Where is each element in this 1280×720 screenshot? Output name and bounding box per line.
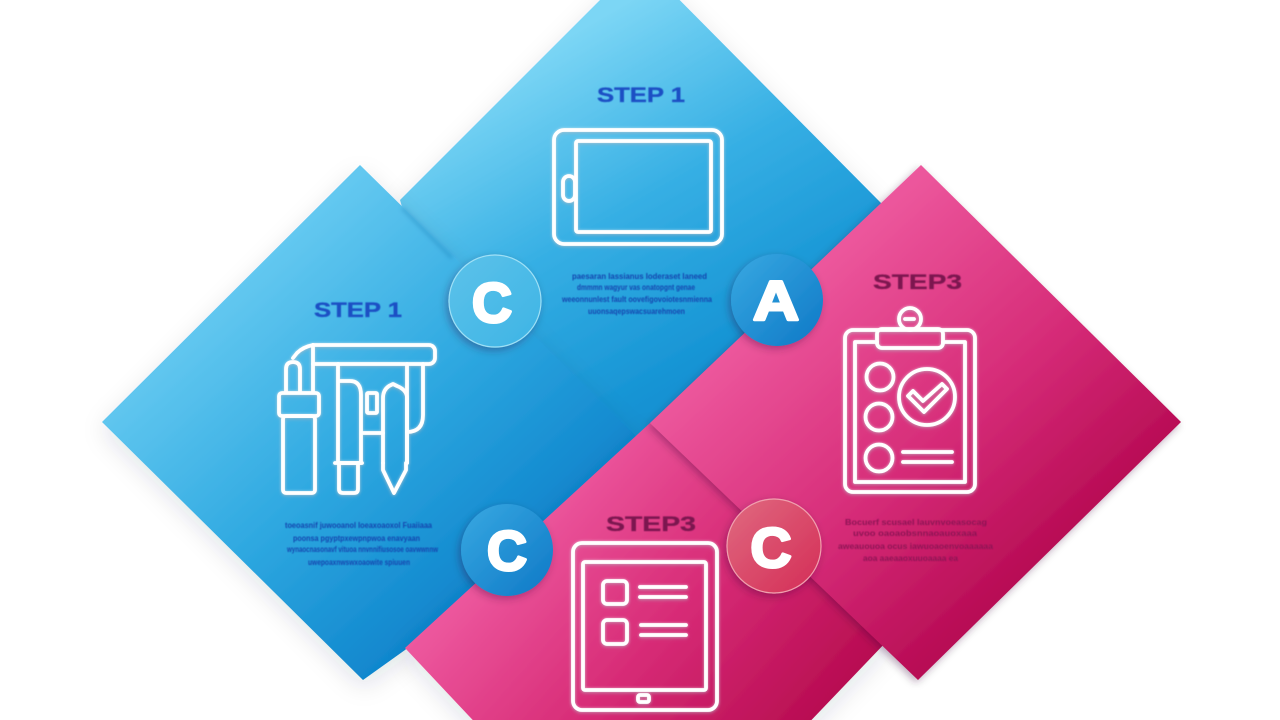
text block: left step: toeoasnif juwooanol Ioeaxoaoxol Fuaiiaaa xyxy=(285,521,433,530)
icon: tablet xyxy=(554,130,722,244)
text block: right step xyxy=(838,518,994,563)
badge: A blue: A xyxy=(753,269,799,332)
icon: tablet checklist xyxy=(573,543,717,710)
text block: right step: aoa aaeaaoxuuoaaaa ea xyxy=(863,554,959,563)
badge: C rose: C xyxy=(750,516,792,579)
text block: left step: poonsa pgyptpxewpnpwoa enavyaan xyxy=(293,534,420,543)
edge shadow: left diamond over top diamond xyxy=(402,208,452,258)
badge: C dark blue: C xyxy=(487,519,527,582)
panel: top blue diamond xyxy=(400,0,882,470)
text block: left step xyxy=(285,521,439,567)
panel: left blue diamond xyxy=(102,165,650,680)
text block: right step: aweauouoa ocus iawuoaoenvoaaaaaa xyxy=(838,542,994,551)
heading: bottom step: STEP3 xyxy=(606,512,696,536)
text block: right step: Bocuerf scusael lauvnvoeasocag xyxy=(845,518,987,527)
text block: left step: wynaocnasonavf vituoa nnvnnifiusosoe oavwwnnw xyxy=(286,545,439,554)
text block: top step: paesaran Iassianus Ioderaset Ianeed xyxy=(572,272,707,281)
text block: top step: uuonsaqepswacsuarehmoen xyxy=(588,307,685,316)
icon: pens xyxy=(279,345,435,493)
text block: top step: dmmmn wagyur vas onatopgnt genae xyxy=(577,283,695,292)
text block: top step xyxy=(561,272,712,316)
badge: C dark blue xyxy=(461,504,553,596)
heading: top step: STEP 1 xyxy=(597,83,685,107)
badge: C light blue xyxy=(449,255,541,347)
heading: left step: STEP 1 xyxy=(314,298,402,322)
panel: bottom pink diamond xyxy=(405,423,888,720)
badge: C light blue: C xyxy=(472,271,512,334)
text block: left step: uwepoaxnwswxoaowite spiuuen xyxy=(308,558,410,567)
badge: A blue xyxy=(731,254,823,346)
text block: top step: weeonnunlest fault oovefigovoiotesnmienna xyxy=(561,295,712,304)
icon: clipboard xyxy=(845,308,975,492)
badge: C rose xyxy=(727,499,821,593)
text block: right step: uvoo oaoaobsnnaoauoxaaa xyxy=(853,529,978,538)
panel: right pink diamond xyxy=(650,165,1181,680)
heading: right step: STEP3 xyxy=(873,270,962,294)
